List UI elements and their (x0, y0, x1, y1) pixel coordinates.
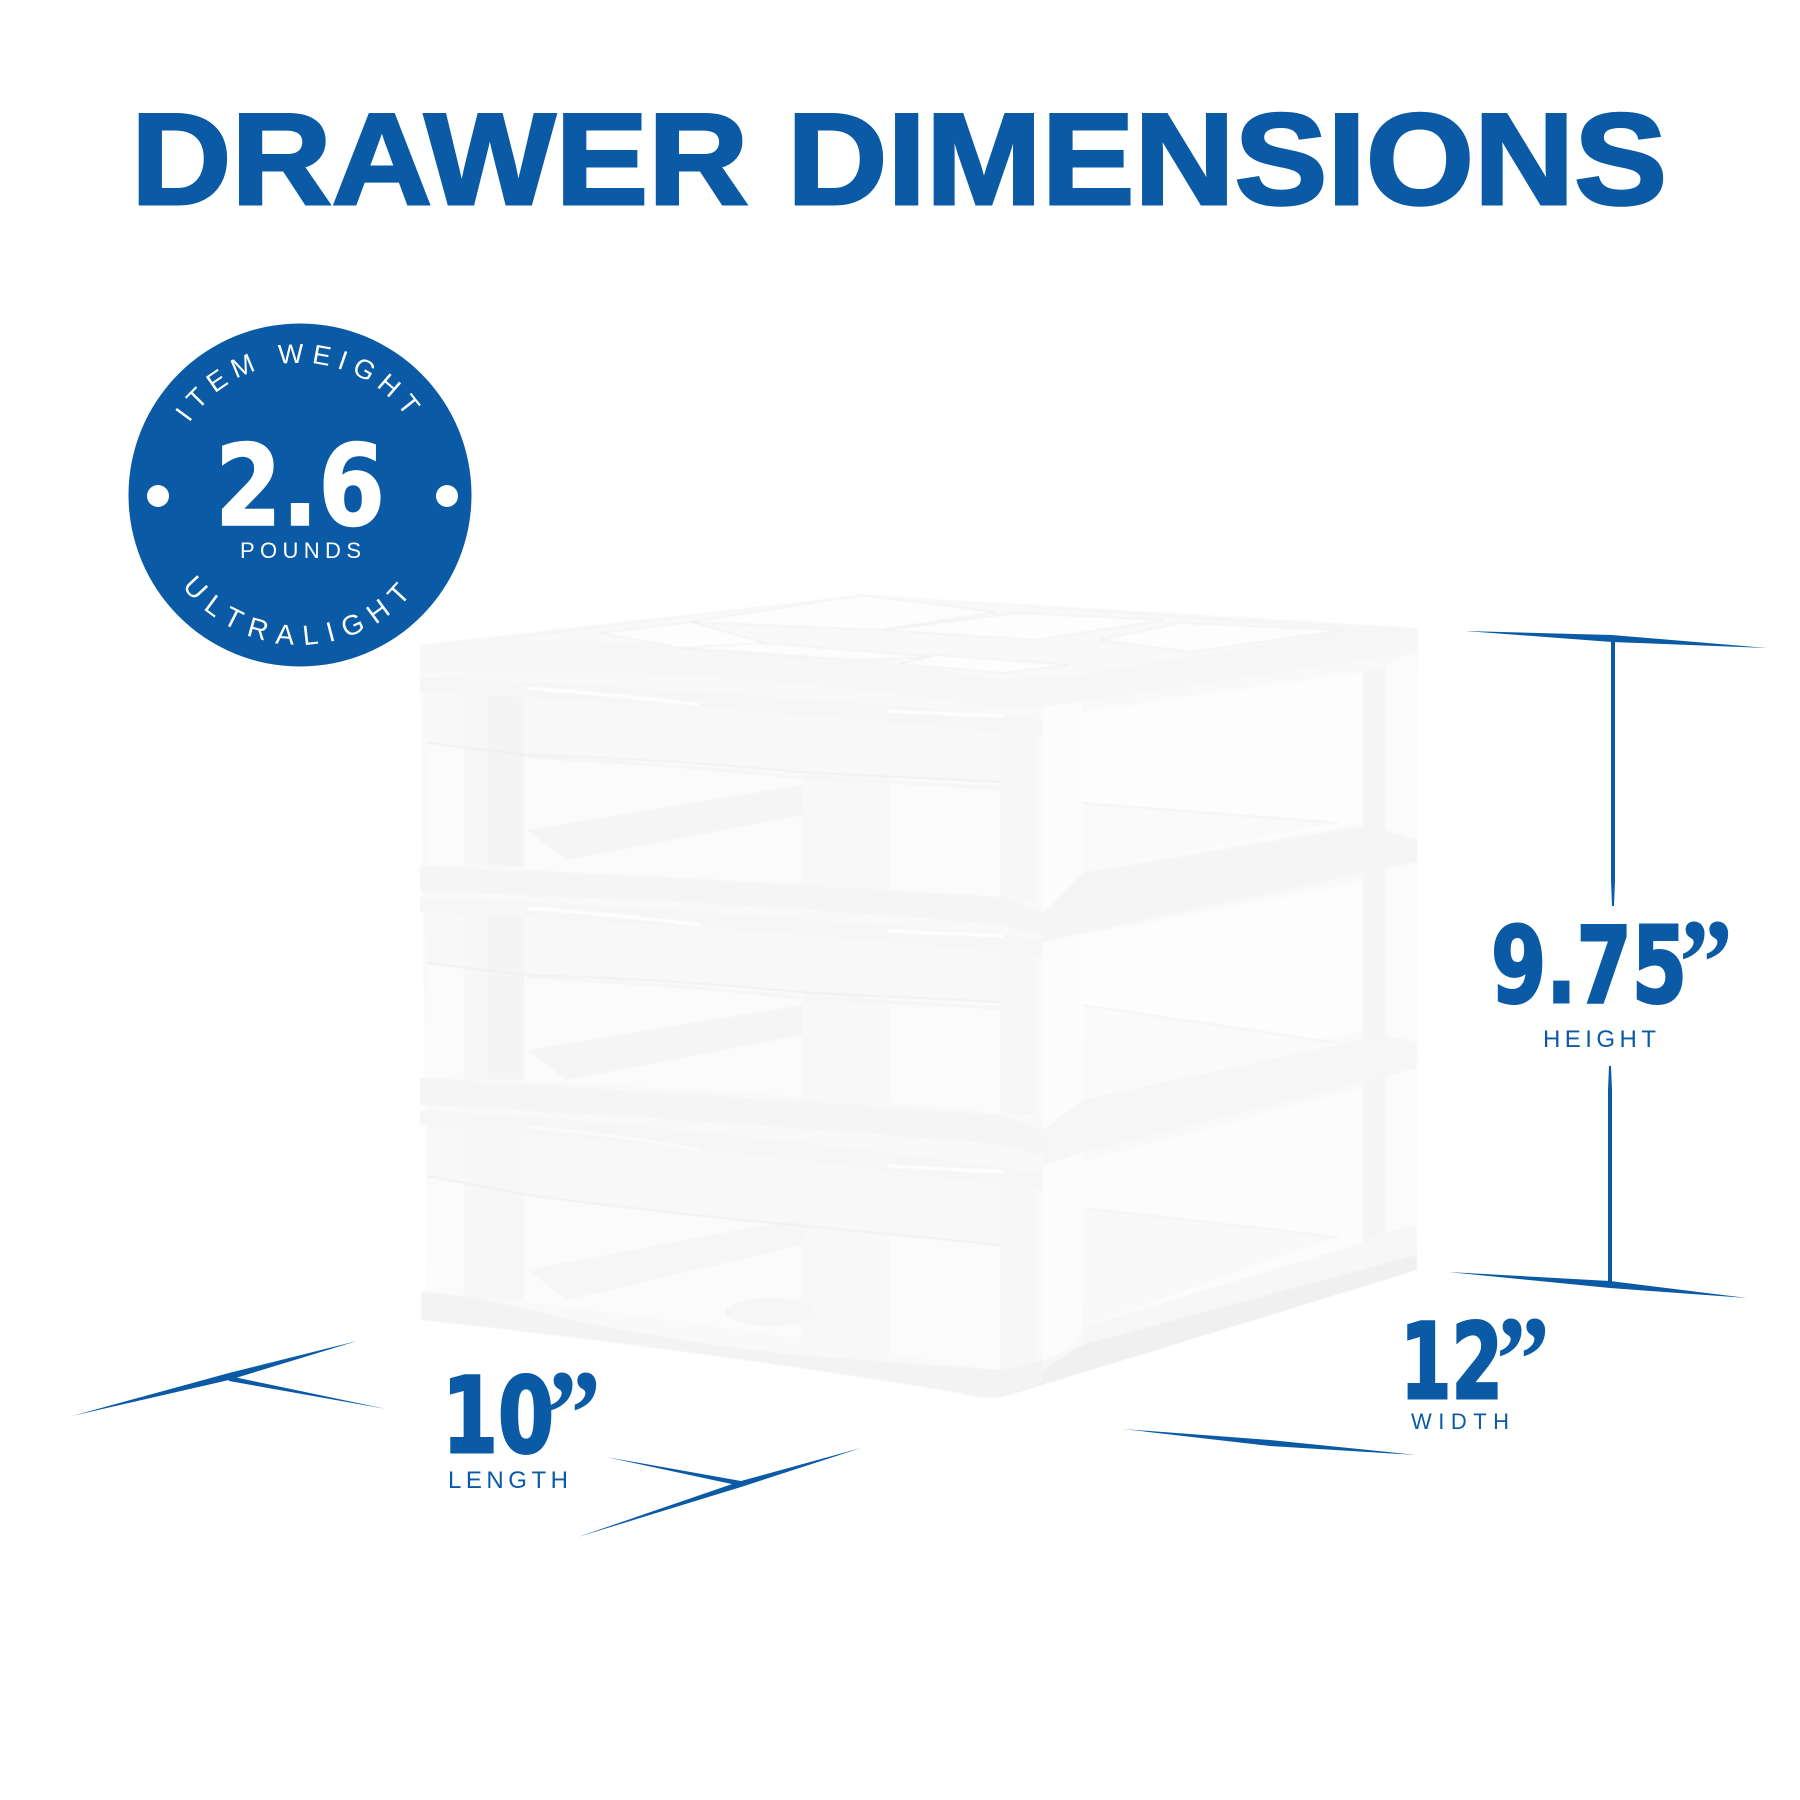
length label: LENGTH (448, 1467, 568, 1494)
front corner column (1043, 700, 1082, 1385)
curved label: ultralight (154, 521, 446, 645)
height value: ” (1679, 895, 1733, 1033)
length value: 10 (442, 1355, 554, 1477)
side base (1003, 1225, 1417, 1397)
width label: WIDTH (1411, 1409, 1509, 1434)
height label: HEIGHT (1543, 1026, 1656, 1053)
side panel: top window (1082, 672, 1363, 872)
height dimension marker (1448, 631, 1767, 1298)
curved label: item weight (170, 363, 430, 472)
middle drawer (420, 897, 1043, 1155)
weight badge: ULTRALIGHT (186, 575, 406, 645)
length value: ” (547, 1346, 601, 1484)
side rail lower (1043, 1035, 1417, 1165)
width value: ” (1496, 1292, 1550, 1430)
height value: 9.75 (1491, 905, 1687, 1027)
right dot (436, 485, 458, 507)
unit silhouette (420, 595, 1418, 1398)
badge circle (128, 324, 472, 666)
base lip (421, 1292, 1043, 1398)
side panel: middle window (1082, 882, 1363, 1100)
length dimension marker left (72, 1341, 386, 1416)
weight value: 2.6 (215, 422, 385, 552)
weight badge (128, 324, 472, 666)
title: DRAWER DIMENSIONS (131, 86, 1667, 232)
width dimension marker (1123, 1429, 1417, 1455)
product: three drawer storage unit (420, 595, 1418, 1398)
rear corner column (1363, 650, 1417, 1270)
side rail upper (1043, 823, 1417, 943)
top lid (420, 595, 1418, 708)
weight unit: POUNDS (240, 538, 361, 563)
side panel: bottom window (1082, 1088, 1363, 1327)
width value: 12 (1400, 1301, 1503, 1423)
weight badge: ITEM WEIGHT (176, 344, 421, 421)
bottom drawer (420, 1110, 1043, 1375)
left dot (147, 485, 169, 507)
length dimension marker right (578, 1448, 861, 1537)
top drawer (420, 677, 1043, 935)
